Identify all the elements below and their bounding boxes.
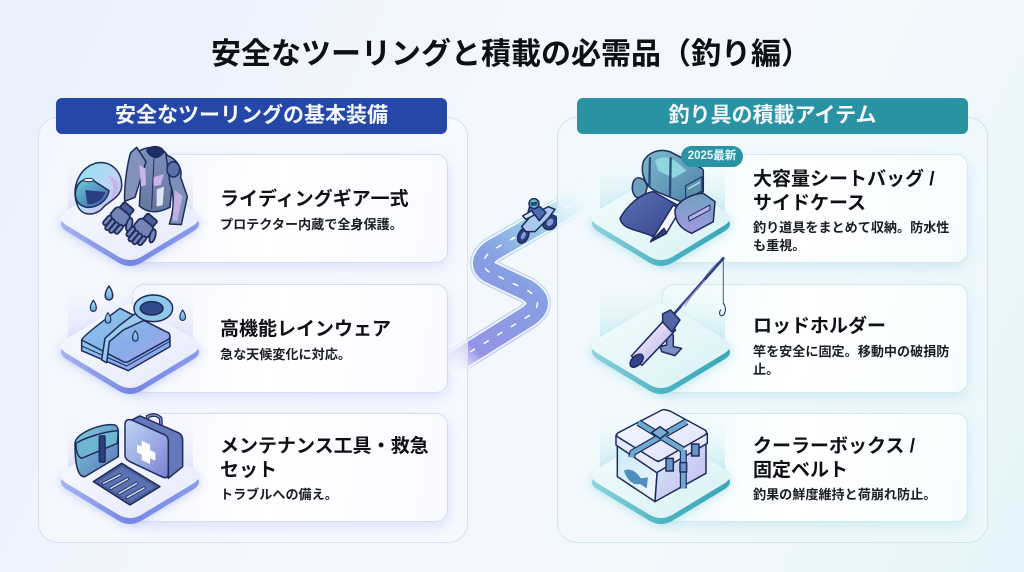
- text: cooler box and fixing belt: [753, 436, 936, 502]
- card: riding gear: [58, 146, 451, 272]
- text: cooler box and fixing belt: 固定ベルト: [753, 460, 848, 480]
- icon: rod holder: [588, 256, 734, 399]
- card: rod holder: [588, 256, 972, 402]
- text: maintenance tools and first aid: セット: [220, 460, 277, 480]
- text: seat bag and side case: も重視。: [753, 238, 805, 253]
- icon: tool pouch, first aid case and tool roll: [58, 413, 202, 528]
- road with motorcycle: [448, 194, 586, 370]
- badge: 2025 latest: [681, 146, 743, 167]
- card: cooler box and fixing belt: [588, 408, 972, 531]
- text: seat bag and side case: [753, 168, 949, 253]
- text: maintenance tools and first aid: メンテナンス工具・救急: [220, 436, 429, 457]
- text: rainwear: 高機能レインウェア: [220, 319, 391, 340]
- text: rod holder: 止。: [753, 362, 779, 376]
- text: seat bag and side case: サイドケース: [753, 192, 866, 214]
- text: riding gear: [220, 188, 409, 232]
- icon: motorcycle: [515, 199, 560, 245]
- text: rainwear: 急な天候変化に対応。: [220, 346, 351, 362]
- panel: basic safety equipment: [38, 98, 468, 543]
- text: riding gear: ライディングギア一式: [220, 189, 409, 210]
- heading: fishing gear items: 釣り具の積載アイテム: [669, 104, 876, 127]
- heading: basic safety equipment: 安全なツーリングの基本装備: [115, 104, 388, 127]
- text: rod holder: 竿を安全に固定。移動中の破損防: [753, 344, 949, 358]
- card: maintenance tools and first aid: [58, 413, 451, 530]
- card: rainwear: [58, 284, 451, 401]
- text: rainwear: [220, 318, 391, 362]
- text: seat bag and side case: 大容量シートバッグ /: [753, 169, 935, 190]
- icon: helmet, jacket and gloves: [58, 146, 202, 270]
- text: seat bag and side case: 釣り道具をまとめて収納。防水性: [753, 220, 949, 235]
- text: cooler box and fixing belt: クーラーボックス /: [753, 436, 915, 457]
- text: maintenance tools and first aid: [220, 436, 429, 502]
- text: cooler box and fixing belt: 釣果の鮮度維持と荷崩れ防止。: [753, 487, 936, 502]
- text: riding gear: プロテクター内蔵で全身保護。: [220, 216, 403, 232]
- heading: basic safety equipment: [56, 98, 447, 134]
- icon: folded rainwear with drops: [58, 285, 202, 398]
- text: maintenance tools and first aid: トラブルへの備え。: [220, 487, 338, 502]
- panel: fishing gear items: [557, 98, 988, 543]
- badge: 2025 latest: 2025最新: [688, 150, 736, 162]
- text: rod holder: ロッドホルダー: [753, 316, 886, 337]
- heading: fishing gear items: [577, 98, 968, 134]
- icon: seat bag and side case: [588, 150, 734, 271]
- icon: cooler box: [588, 408, 734, 529]
- title: 安全なツーリングと積載の必需品（釣り編）: [211, 38, 811, 71]
- text: rod holder: [753, 316, 949, 376]
- card: seat bag and side case: [588, 146, 972, 272]
